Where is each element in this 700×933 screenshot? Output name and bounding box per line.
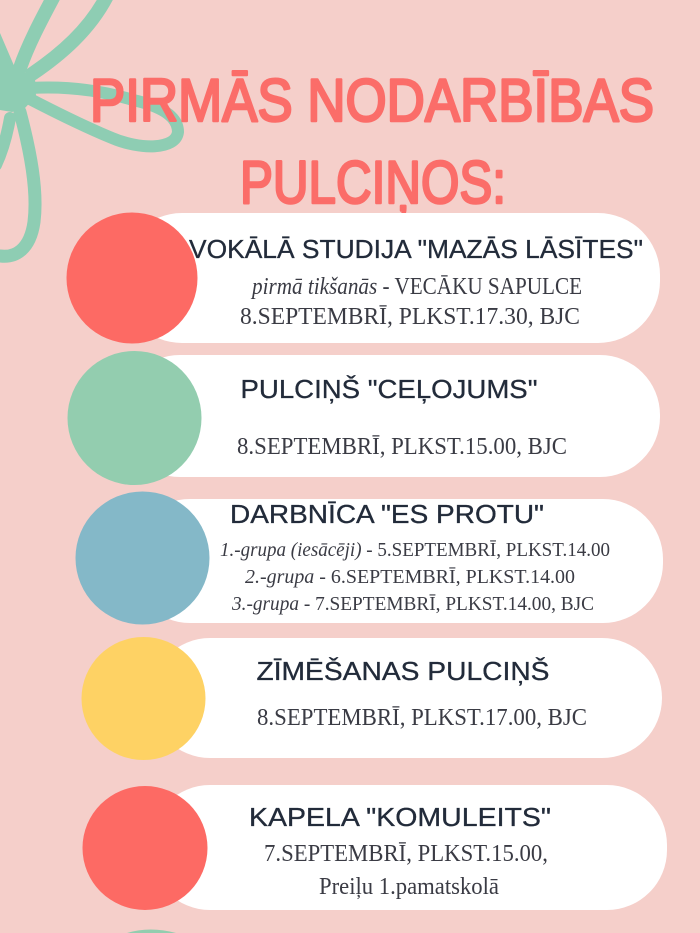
heading: Mazās Lāsītes: VOKĀLĀ STUDIJA "MAZĀS LĀSĪTES" bbox=[189, 236, 643, 264]
heading: Ceļojums: PULCIŅŠ "CEĻOJUMS" bbox=[240, 375, 538, 404]
title: PULCIŅOS: bbox=[240, 149, 506, 216]
heading: Komuleits: KAPELA "KOMULEITS" bbox=[249, 804, 551, 832]
text: date: 8.SEPTEMBRĪ, PLKST.17.30, BJC bbox=[240, 304, 580, 330]
text: date: 8.SEPTEMBRĪ, PLKST.15.00, BJC bbox=[237, 434, 567, 460]
icon: blue circle bbox=[76, 492, 210, 624]
icon: green circle bbox=[68, 351, 202, 485]
panel: Ceļojums bbox=[68, 351, 660, 485]
text: date: 7.SEPTEMBRĪ, PLKST.15.00, bbox=[264, 841, 548, 867]
icon: green flower ribbon bbox=[0, 0, 178, 256]
icon: red circle bbox=[66, 212, 198, 344]
text: location: Preiļu 1.pamatskolā bbox=[319, 874, 499, 900]
heading: Zīmēšanas pulciņš: ZĪMĒŠANAS PULCIŅŠ bbox=[256, 657, 550, 686]
title bbox=[90, 67, 654, 216]
text: group 1: 1.-grupa (iesācēji) - 5.SEPTEMBRĪ, PLKST.14.00 bbox=[220, 539, 610, 561]
panel: Zīmēšanas pulciņš bbox=[82, 637, 662, 760]
icon: green circle partial bbox=[127, 930, 176, 933]
panel: Mazās Lāsītes bbox=[66, 212, 660, 344]
icon: yellow circle bbox=[82, 637, 206, 760]
icon: red circle bbox=[82, 786, 208, 910]
text: first meeting: pirmā tikšanās - VECĀKU SAPULCE bbox=[250, 274, 582, 300]
text: date: 8.SEPTEMBRĪ, PLKST.17.00, BJC bbox=[257, 705, 587, 731]
panel: Es protu bbox=[76, 492, 663, 624]
text: group 3: 3.-grupa - 7.SEPTEMBRĪ, PLKST.14.00, BJC bbox=[231, 593, 594, 615]
heading: Es protu: DARBNĪCA "ES PROTU" bbox=[230, 501, 544, 529]
panel: Komuleits bbox=[82, 785, 667, 910]
text: group 2: 2.-grupa - 6.SEPTEMBRĪ, PLKST.14.00 bbox=[245, 566, 575, 588]
